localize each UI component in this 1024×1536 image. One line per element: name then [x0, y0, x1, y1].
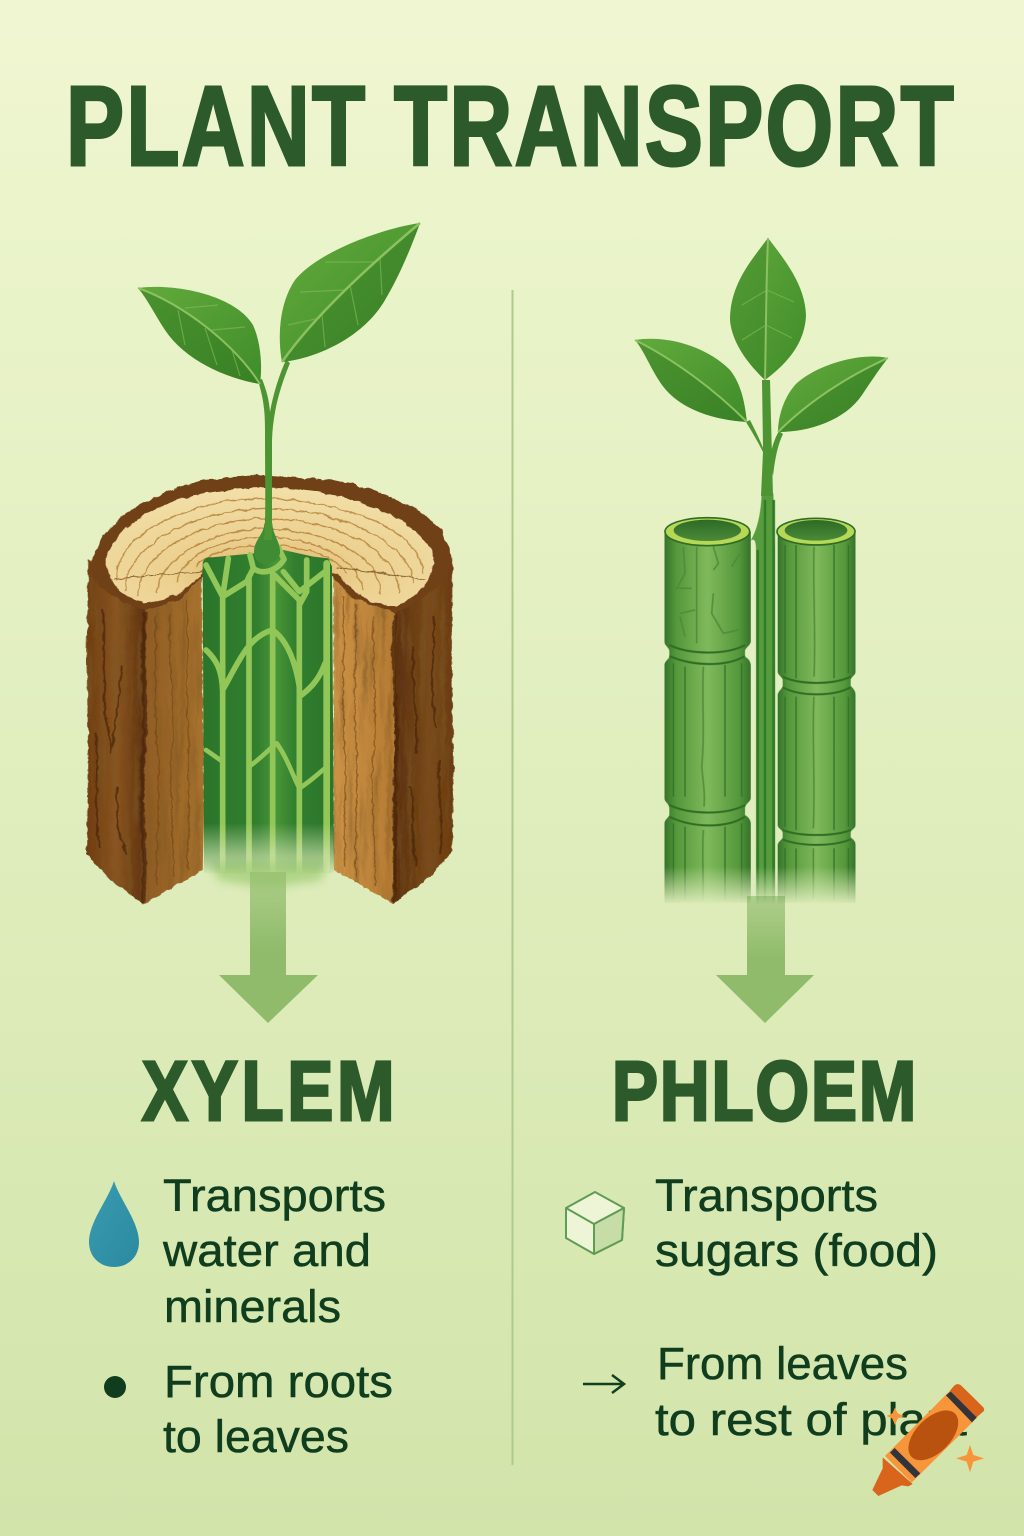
arrow: xylem downward flow: [219, 872, 318, 1023]
crayon body: [885, 1391, 977, 1483]
icon: crayon watermark: [872, 1384, 984, 1496]
crayon cap: [950, 1384, 984, 1417]
log bark left: [87, 560, 147, 904]
icon: water drop: [89, 1181, 139, 1267]
icon: sugar cube: [566, 1192, 624, 1254]
illustration: cut log with xylem: [87, 475, 453, 904]
left tube opening: [665, 518, 750, 546]
xylem heading: XYLEM: [142, 1045, 395, 1139]
text: transports water and minerals: [162, 1170, 386, 1332]
green vessel panel: [203, 550, 334, 873]
faded glow below panel: [210, 862, 327, 888]
plant stem: [258, 360, 290, 540]
illustration: phloem tubes: [664, 493, 856, 903]
sparkle large: [956, 1445, 984, 1472]
text: transports sugars (food): [655, 1170, 938, 1276]
text: transports water and minerals: Transports: [163, 1170, 386, 1221]
icon: plant shoot on log: [138, 223, 420, 540]
text: from roots to leaves: to leaves: [163, 1411, 349, 1462]
text: transports water and minerals: water and: [162, 1225, 371, 1276]
text: from leaves to rest of plant: [655, 1338, 968, 1445]
icon: plant shoot on phloem: [635, 238, 888, 496]
text: transports water and minerals: minerals: [164, 1281, 341, 1332]
arrow: phloem downward flow: [716, 896, 814, 1023]
panel: xylem: [87, 223, 453, 1462]
text: from roots to leaves: [163, 1356, 393, 1462]
left wood face: [143, 577, 205, 904]
crayon bands: [890, 1391, 977, 1478]
right wood face: [333, 577, 395, 904]
right outer bark: [393, 557, 453, 904]
crayon label: [899, 1401, 967, 1469]
right leaf: [778, 357, 888, 432]
bark grain lines: [96, 610, 442, 900]
top leaf: [730, 238, 806, 380]
central stem: [751, 493, 775, 903]
icon: thin arrow: [583, 1375, 624, 1393]
text: from leaves to rest of plant: From leaves: [657, 1338, 908, 1389]
wood grain lines: [155, 597, 375, 887]
tube openings: [665, 518, 855, 546]
log wood and bark: [87, 475, 453, 904]
left leaf: [635, 339, 747, 422]
stem base bulb: [254, 523, 280, 564]
growth ring lines: [117, 498, 423, 597]
right tube: [778, 532, 856, 903]
text: transports sugars (food): Transports: [655, 1170, 878, 1221]
crayon tip: [872, 1457, 913, 1496]
left tube: [664, 532, 751, 903]
left leaf: [138, 287, 261, 384]
right leaf: [280, 223, 420, 362]
sparkle small: [887, 1408, 904, 1425]
background behind fading panel: [203, 807, 334, 883]
text: from leaves to rest of plant: to rest of plant: [655, 1394, 968, 1445]
icon: bullet dot: [104, 1376, 126, 1398]
cut surface rings: [105, 487, 434, 606]
stem: [746, 380, 783, 496]
title: PLANT TRANSPORT: [66, 64, 954, 190]
xylem panel: [203, 547, 334, 880]
panel: phloem: [566, 238, 968, 1445]
right tube opening: [777, 518, 855, 545]
phloem heading: PHLOEM: [612, 1045, 916, 1139]
text: transports sugars (food): sugars (food): [655, 1225, 938, 1276]
text: from roots to leaves: From roots: [164, 1356, 393, 1407]
dark rim of cut surface: [88, 475, 453, 613]
vein network: [206, 547, 327, 880]
